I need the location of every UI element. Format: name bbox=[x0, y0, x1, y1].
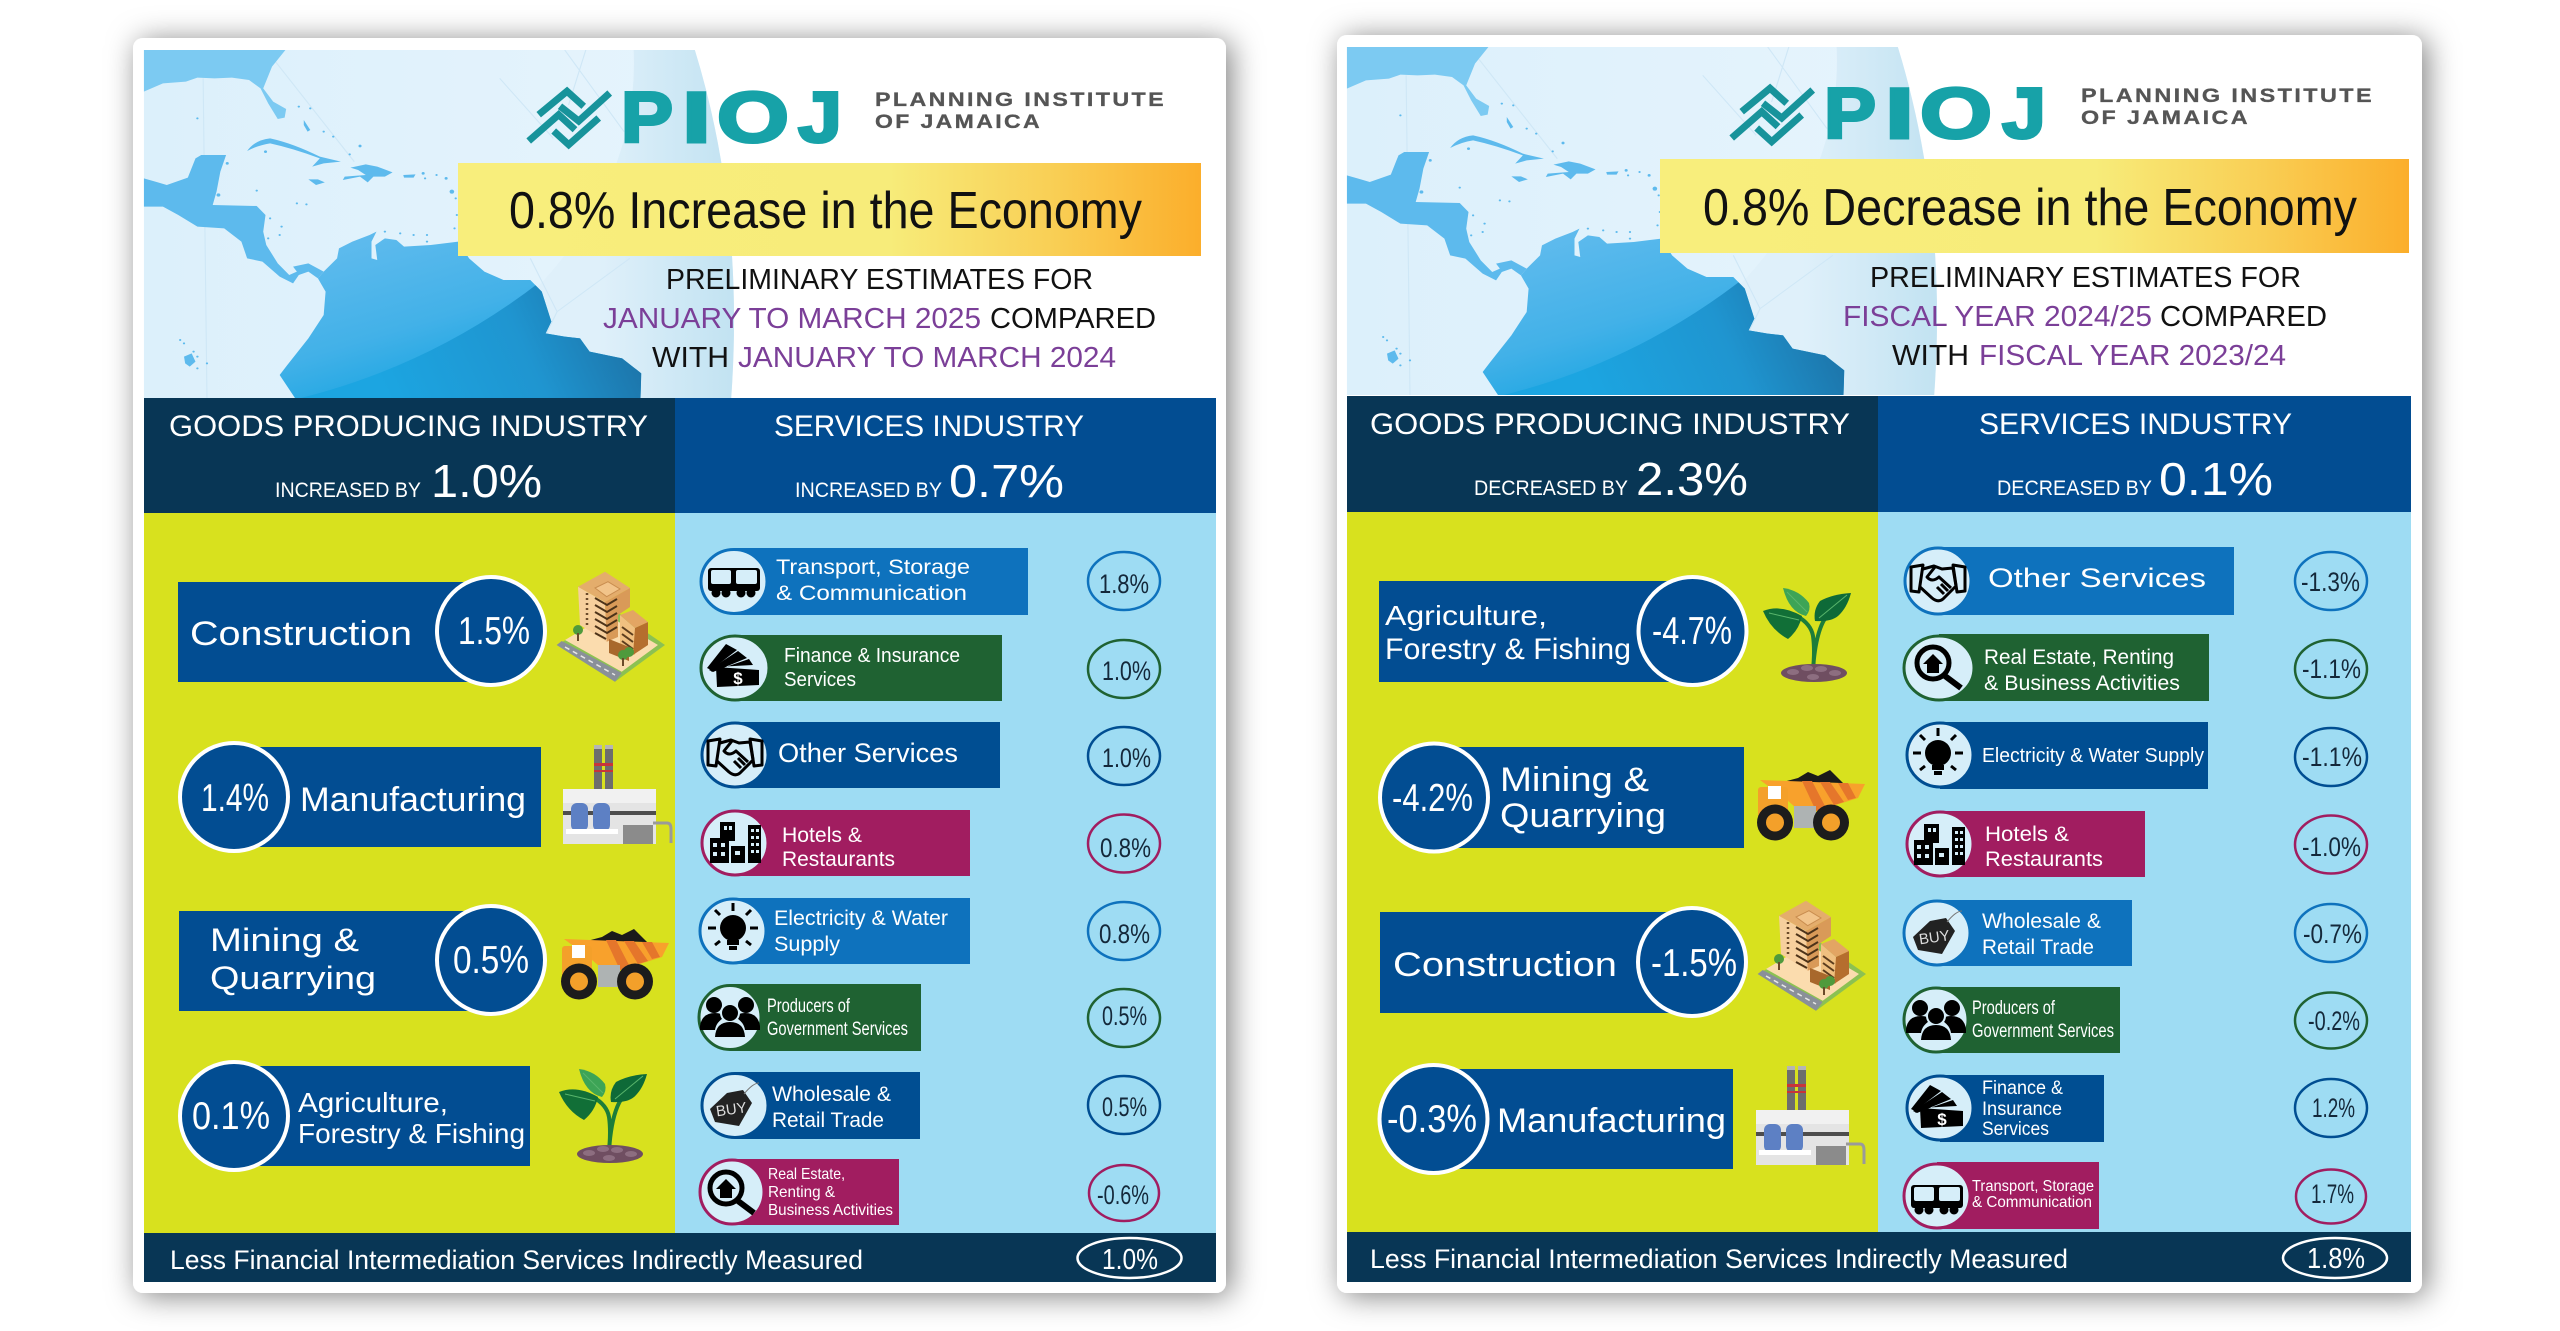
construction: Construction bbox=[1393, 946, 1617, 984]
header: goods producing: DECREASED BY bbox=[1474, 477, 1628, 500]
other services bbox=[1905, 547, 2367, 615]
electricity bbox=[700, 898, 1160, 964]
hotels bbox=[702, 810, 1160, 876]
finance bbox=[701, 635, 1160, 701]
transport bbox=[701, 548, 1160, 615]
electricity: Electricity & Water bbox=[774, 907, 948, 930]
real estate: & Business Activities bbox=[1984, 672, 2180, 695]
header: goods producing: GOODS PRODUCING INDUSTRY bbox=[169, 410, 648, 443]
panel: goods sectors bbox=[144, 513, 675, 1233]
government services: 0.5% bbox=[1102, 1001, 1147, 1031]
other services: -1.3% bbox=[2301, 567, 2360, 597]
icon: plant bbox=[559, 1069, 647, 1163]
real estate bbox=[700, 1159, 1159, 1225]
logo: P bbox=[1824, 75, 1876, 154]
transport: Transport, Storage bbox=[1972, 1178, 2094, 1195]
other services: Other Services bbox=[778, 738, 958, 768]
government services bbox=[699, 984, 1160, 1051]
title banner bbox=[1660, 159, 2409, 253]
agriculture: 0.1% bbox=[192, 1095, 270, 1138]
subtitle bbox=[603, 264, 1156, 374]
construction: -1.5% bbox=[1651, 942, 1737, 985]
real estate: Real Estate, Renting bbox=[1984, 646, 2174, 669]
electricity: -1.1% bbox=[2302, 742, 2362, 772]
icon: factory bbox=[563, 745, 671, 844]
panel: goods sectors bbox=[1347, 512, 1878, 1232]
icon: building bbox=[1758, 901, 1866, 1011]
hotels: 0.8% bbox=[1100, 833, 1151, 863]
mining: -4.2% bbox=[1392, 777, 1473, 820]
finance: Insurance bbox=[1982, 1099, 2062, 1120]
header: services: SERVICES INDUSTRY bbox=[1979, 408, 2292, 441]
title banner: 0.8% Increase in the Economy bbox=[509, 182, 1142, 240]
logo: J bbox=[2002, 75, 2046, 154]
icon: truck bbox=[1757, 770, 1865, 840]
subtitle: COMPARED bbox=[990, 303, 1156, 335]
header: goods producing bbox=[144, 398, 675, 513]
finance: Services bbox=[1982, 1119, 2049, 1140]
transport: 1.7% bbox=[2311, 1179, 2354, 1209]
hotels: Restaurants bbox=[782, 848, 895, 871]
electricity: Supply bbox=[774, 933, 841, 956]
agriculture bbox=[180, 1062, 530, 1170]
logo bbox=[529, 79, 1166, 158]
subtitle: COMPARED bbox=[2160, 301, 2327, 333]
manufacturing bbox=[1380, 1065, 1733, 1173]
subtitle: WITH bbox=[652, 342, 729, 374]
wholesale: Wholesale & bbox=[1982, 910, 2101, 933]
title banner bbox=[458, 163, 1201, 256]
title banner: 0.8% Decrease in the Economy bbox=[1703, 179, 2357, 237]
icon: factory bbox=[1756, 1066, 1864, 1165]
panel: left infographic card bbox=[133, 38, 1226, 1293]
real estate bbox=[1904, 634, 2367, 701]
header: services: 0.7% bbox=[949, 455, 1064, 507]
other services: 1.0% bbox=[1102, 743, 1151, 773]
map background bbox=[1347, 47, 1937, 395]
government services bbox=[1904, 987, 2367, 1053]
logo: I bbox=[682, 79, 711, 158]
real estate: Real Estate, bbox=[768, 1166, 845, 1183]
finance: 1.2% bbox=[2312, 1093, 2355, 1123]
subtitle: FISCAL YEAR 2024/25 bbox=[1843, 301, 2152, 333]
manufacturing: Manufacturing bbox=[300, 781, 526, 819]
government services: Government Services bbox=[767, 1019, 908, 1040]
header: goods producing: GOODS PRODUCING INDUSTRY bbox=[1370, 408, 1850, 441]
electricity bbox=[1907, 722, 2367, 789]
header: goods producing: 2.3% bbox=[1636, 453, 1748, 505]
finance: Services bbox=[784, 669, 856, 691]
footer bar: 1.0% bbox=[1102, 1244, 1158, 1276]
construction bbox=[1380, 908, 1746, 1016]
government services: -0.2% bbox=[2308, 1006, 2360, 1036]
construction bbox=[178, 577, 545, 685]
transport bbox=[1904, 1162, 2366, 1229]
finance: Finance & Insurance bbox=[784, 645, 960, 667]
logo: P bbox=[621, 79, 673, 158]
subtitle bbox=[1843, 262, 2327, 372]
agriculture: Agriculture, bbox=[1385, 600, 1547, 631]
map background bbox=[144, 50, 734, 398]
real estate: -0.6% bbox=[1097, 1180, 1149, 1210]
logo: O bbox=[1920, 75, 1992, 154]
manufacturing: 1.4% bbox=[201, 777, 269, 820]
panel: services sectors bbox=[675, 513, 1216, 1233]
real estate: Renting & bbox=[768, 1184, 835, 1201]
panel: right infographic card bbox=[1337, 35, 2422, 1293]
government services: Producers of bbox=[1972, 998, 2056, 1019]
agriculture: Agriculture, bbox=[298, 1087, 448, 1118]
header: services bbox=[1878, 396, 2411, 512]
icon: building bbox=[557, 572, 665, 682]
electricity: 0.8% bbox=[1099, 919, 1150, 949]
mining: Quarrying bbox=[1500, 797, 1666, 835]
wholesale: Retail Trade bbox=[1982, 936, 2094, 959]
mining: Mining & bbox=[210, 922, 359, 958]
header: goods producing: INCREASED BY bbox=[275, 479, 421, 502]
mining bbox=[179, 906, 545, 1014]
wholesale bbox=[1904, 900, 2367, 966]
subtitle: JANUARY TO MARCH 2025 bbox=[603, 303, 981, 335]
finance bbox=[1907, 1075, 2367, 1142]
mining bbox=[1380, 744, 1744, 852]
agriculture: -4.7% bbox=[1652, 610, 1732, 653]
transport: Transport, Storage bbox=[776, 556, 970, 579]
wholesale: Wholesale & bbox=[772, 1083, 891, 1106]
logo bbox=[1732, 75, 2374, 154]
header: services: 0.1% bbox=[2159, 453, 2273, 505]
construction: 1.5% bbox=[458, 610, 530, 653]
other services bbox=[702, 722, 1160, 788]
wholesale: Retail Trade bbox=[772, 1109, 884, 1132]
footer bar: 1.8% bbox=[2307, 1243, 2365, 1275]
manufacturing: Manufacturing bbox=[1497, 1102, 1726, 1140]
electricity: Electricity & Water Supply bbox=[1982, 745, 2204, 767]
subtitle: WITH bbox=[1892, 340, 1969, 372]
manufacturing: -0.3% bbox=[1387, 1098, 1477, 1141]
wholesale: -0.7% bbox=[2303, 919, 2362, 949]
manufacturing bbox=[180, 743, 541, 851]
wholesale: 0.5% bbox=[1102, 1092, 1147, 1122]
real estate: -1.1% bbox=[2302, 654, 2361, 684]
agriculture: Forestry & Fishing bbox=[1385, 633, 1631, 666]
header: services: INCREASED BY bbox=[795, 479, 942, 502]
logo: O bbox=[717, 79, 789, 158]
transport: & Communication bbox=[1972, 1194, 2092, 1211]
mining: Quarrying bbox=[210, 960, 376, 996]
subtitle: JANUARY TO MARCH 2024 bbox=[738, 342, 1116, 374]
footer bar bbox=[1347, 1232, 2411, 1282]
logo: PLANNING INSTITUTE bbox=[875, 89, 1166, 111]
header: services: DECREASED BY bbox=[1997, 477, 2152, 500]
footer bar bbox=[144, 1233, 1216, 1282]
hotels bbox=[1907, 811, 2367, 877]
icon: truck bbox=[561, 929, 669, 1000]
footer bar: Less Financial Intermediation Services Indirectly Measured bbox=[170, 1245, 863, 1275]
other services: Other Services bbox=[1988, 563, 2206, 593]
logo: OF JAMAICA bbox=[2081, 107, 2250, 129]
construction: Construction bbox=[190, 615, 412, 653]
government services: Producers of bbox=[767, 996, 851, 1017]
hotels: -1.0% bbox=[2302, 832, 2361, 862]
finance: 1.0% bbox=[1102, 656, 1151, 686]
real estate: Business Activities bbox=[768, 1202, 893, 1219]
icon: plant bbox=[1763, 588, 1851, 682]
header: goods producing bbox=[1347, 396, 1878, 512]
logo: I bbox=[1885, 75, 1914, 154]
mining: 0.5% bbox=[453, 939, 529, 982]
wholesale bbox=[702, 1072, 1160, 1139]
hotels: Restaurants bbox=[1985, 848, 2103, 871]
transport: & Communication bbox=[776, 582, 967, 605]
subtitle: FISCAL YEAR 2023/24 bbox=[1979, 340, 2286, 372]
logo: OF JAMAICA bbox=[875, 111, 1042, 133]
logo: J bbox=[798, 79, 842, 158]
agriculture: Forestry & Fishing bbox=[298, 1118, 525, 1149]
header: services bbox=[675, 398, 1216, 513]
logo: PLANNING INSTITUTE bbox=[2081, 85, 2374, 107]
transport: 1.8% bbox=[1099, 569, 1149, 599]
mining: Mining & bbox=[1500, 761, 1649, 799]
header: goods producing: 1.0% bbox=[431, 455, 542, 507]
header: services: SERVICES INDUSTRY bbox=[774, 410, 1084, 443]
finance: Finance & bbox=[1982, 1078, 2063, 1099]
hotels: Hotels & bbox=[782, 824, 862, 847]
government services: Government Services bbox=[1972, 1021, 2114, 1042]
hotels: Hotels & bbox=[1985, 823, 2069, 846]
subtitle: PRELIMINARY ESTIMATES FOR bbox=[666, 264, 1093, 296]
footer bar: Less Financial Intermediation Services Indirectly Measured bbox=[1370, 1244, 2068, 1274]
subtitle: PRELIMINARY ESTIMATES FOR bbox=[1870, 262, 2301, 294]
panel: services sectors bbox=[1878, 512, 2411, 1232]
agriculture bbox=[1379, 577, 1746, 685]
